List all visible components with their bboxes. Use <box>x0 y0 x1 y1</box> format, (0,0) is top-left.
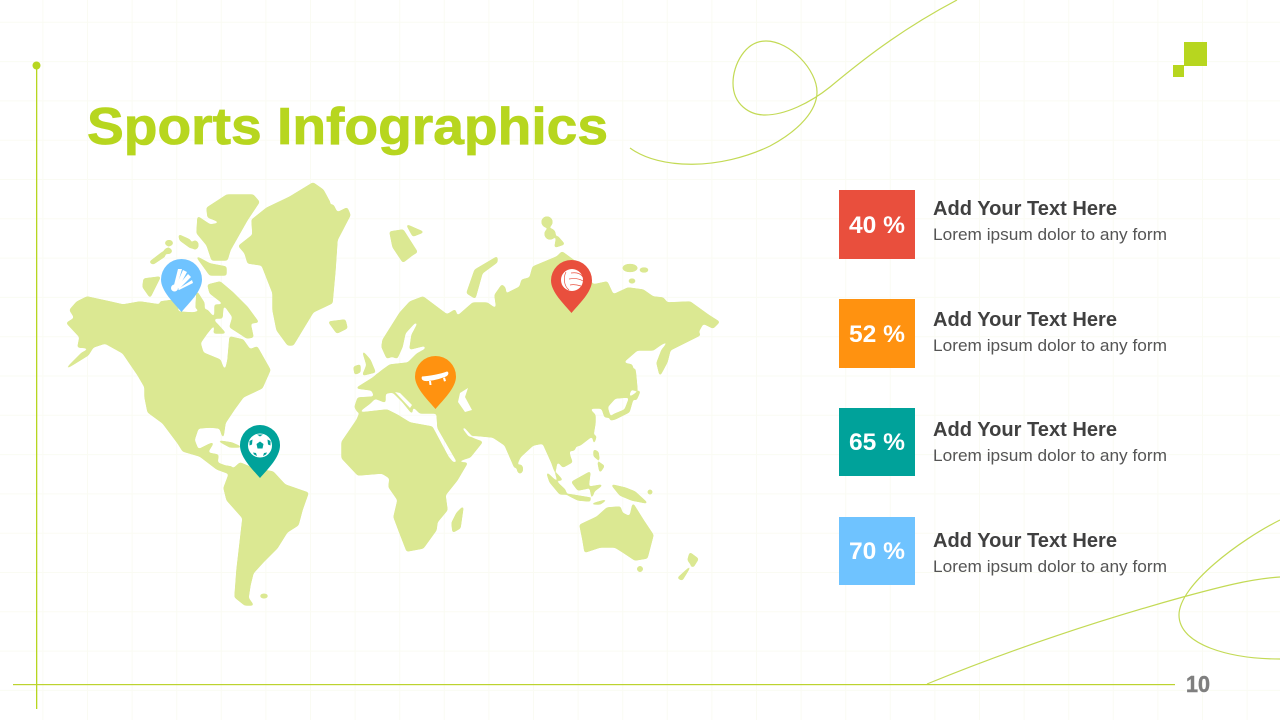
badge: 40 %: 40 % <box>849 212 905 239</box>
page number: 10 <box>1186 671 1210 697</box>
pin: skateboard <box>415 356 456 409</box>
Eurasia <box>355 252 719 480</box>
heading: Add Your Text Here <box>933 198 1117 220</box>
description: Lorem ipsum dolor to any form <box>933 557 1167 576</box>
Caribbean islands <box>219 441 241 447</box>
decorative curve: bottom right swoosh <box>927 520 1280 684</box>
bottom horizontal axis line <box>13 684 1175 685</box>
badge: 65 % <box>839 408 915 476</box>
description: Lorem ipsum dolor to any form <box>933 225 1167 244</box>
decorative curve: top loop <box>630 0 957 164</box>
South-East Asian islands <box>518 436 652 504</box>
Arctic Russian islands <box>542 217 648 283</box>
badge: 52 %: 52 % <box>849 321 905 348</box>
badge: 52 % <box>839 299 915 368</box>
heading: Add Your Text Here <box>933 530 1117 552</box>
badge: 40 % <box>839 190 915 259</box>
Madagascar <box>452 507 463 532</box>
Great Britain and Ireland <box>354 352 375 375</box>
description: Lorem ipsum dolor to any form <box>933 446 1167 465</box>
Iceland <box>329 320 347 333</box>
title: Sports Infographics <box>87 98 608 156</box>
Greenland <box>239 183 350 345</box>
Canadian Arctic islands <box>143 195 259 338</box>
left vertical axis line with dot <box>32 62 40 709</box>
Novaya Zemlya <box>467 257 497 298</box>
badge: 65 %: 65 % <box>849 429 905 456</box>
pin: badminton <box>161 259 202 312</box>
world map <box>67 183 719 605</box>
stat row: 65 % <box>839 408 1167 476</box>
heading: Add Your Text Here <box>933 419 1117 441</box>
pin: volleyball <box>551 260 592 313</box>
South America <box>224 463 308 605</box>
stat row: 70 % <box>839 517 1167 585</box>
logo: lime squares <box>1173 42 1207 77</box>
Svalbard <box>390 225 423 262</box>
stat row: 40 % <box>839 190 1167 259</box>
pin: soccer ball <box>240 425 280 478</box>
heading: Add Your Text Here <box>933 309 1117 331</box>
Australia <box>580 504 653 560</box>
badge: 70 % <box>839 517 915 585</box>
inland seas <box>395 388 472 412</box>
stat row: 52 % <box>839 299 1167 368</box>
description: Lorem ipsum dolor to any form <box>933 336 1167 355</box>
New Zealand <box>678 553 698 580</box>
North America <box>67 297 270 473</box>
badge: 70 %: 70 % <box>849 538 905 565</box>
Africa <box>342 410 467 551</box>
Japan and Sakhalin <box>610 368 640 420</box>
Tasmania <box>638 566 642 572</box>
